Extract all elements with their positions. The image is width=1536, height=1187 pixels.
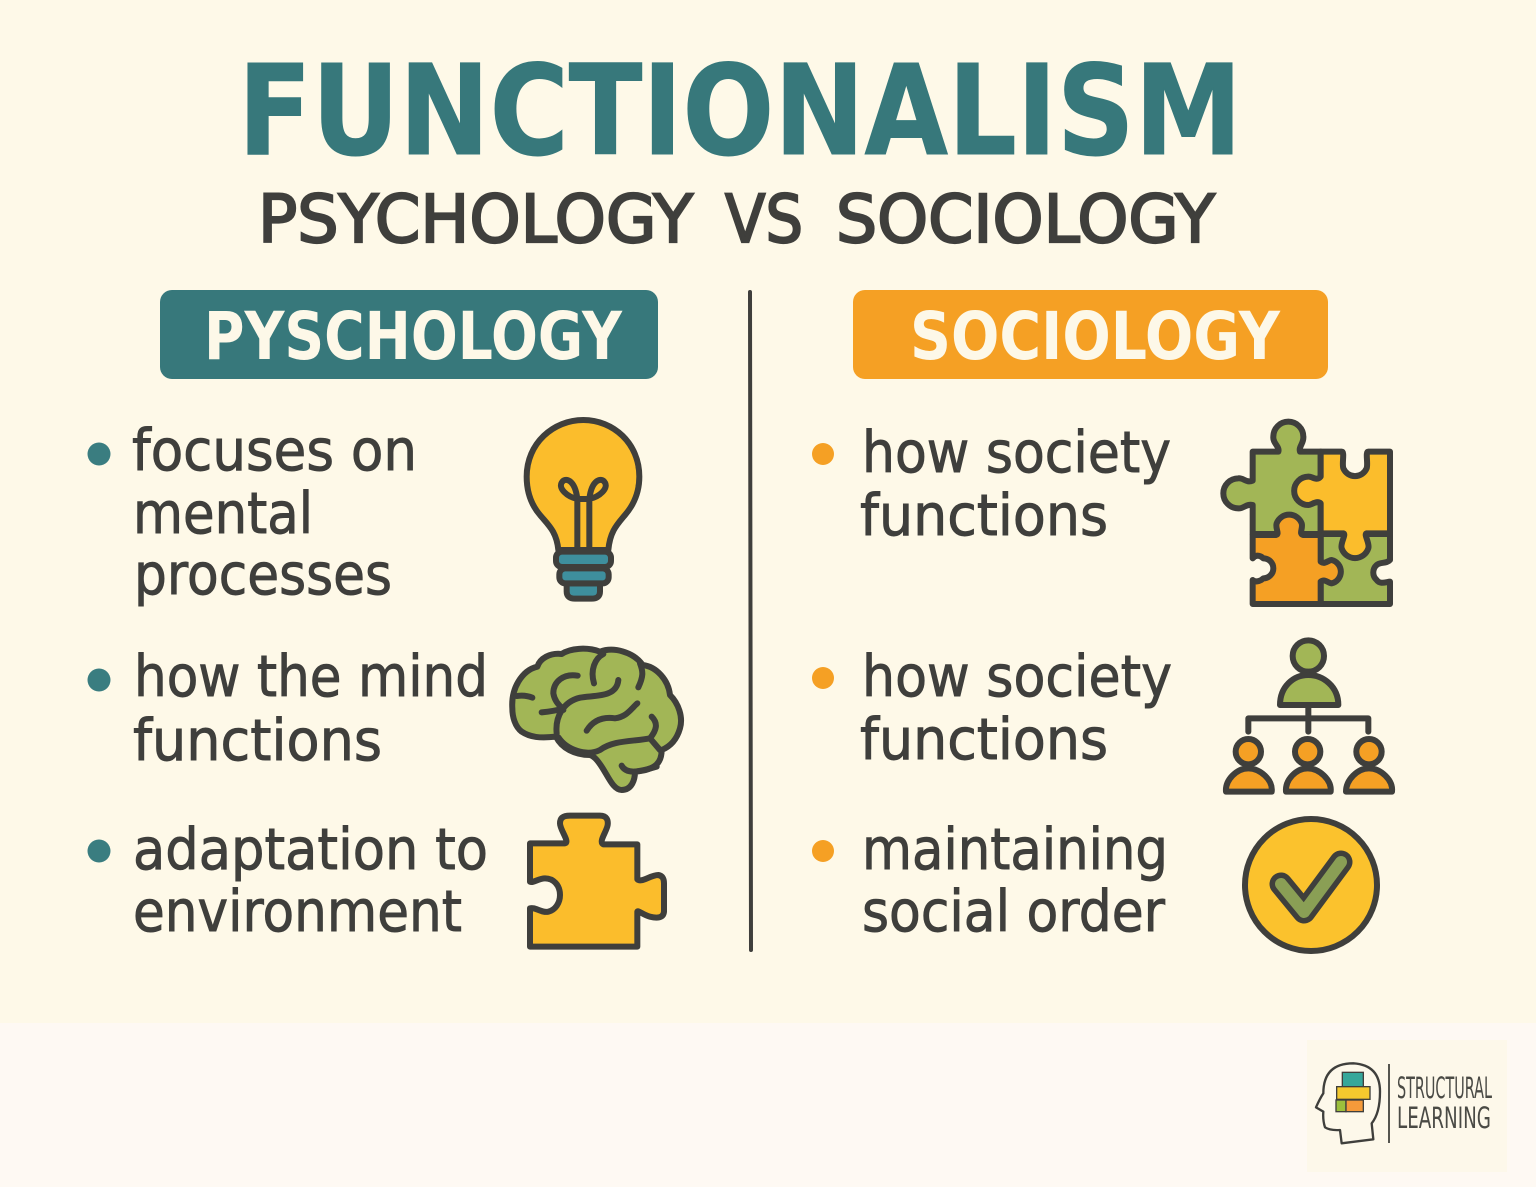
subtitle: [258, 181, 1216, 258]
bullet: how society functions: how society: [862, 420, 1171, 486]
title: FUNCTIONALISM: [238, 39, 1242, 184]
icon: hierarchy of people: [1226, 640, 1392, 792]
logo wordmark: [1397, 1071, 1492, 1135]
bullet: adaptation to environment: [88, 817, 488, 945]
subtitle: SOCIOLOGY: [836, 181, 1216, 258]
bullet: adaptation to environment: environment: [133, 879, 462, 945]
bullet: how the mind functions: [88, 644, 488, 774]
bullet: focuses on mental processes: mental: [133, 481, 313, 547]
icon: check mark badge: [1245, 819, 1377, 951]
icon: head with blocks: [1316, 1063, 1380, 1143]
icon: light bulb: [527, 420, 639, 599]
bullet: how society functions: [812, 420, 1171, 549]
bullet: how society functions: functions: [860, 483, 1108, 549]
center divider: [750, 292, 751, 950]
panel: sociology: [812, 290, 1392, 951]
icon: brain: [512, 649, 681, 790]
bullet: how the mind functions: how the mind: [134, 644, 488, 710]
bullet: focuses on mental processes: focuses on: [132, 418, 417, 484]
bullet: how society functions: [812, 644, 1172, 773]
bullet: how society functions: how society: [862, 644, 1172, 710]
bullet: maintaining social order: social order: [862, 879, 1166, 945]
subtitle: PSYCHOLOGY: [258, 181, 694, 258]
icon: puzzle piece: [530, 816, 664, 947]
bullet: maintaining social order: maintaining: [862, 817, 1168, 883]
bullet: how the mind functions: functions: [133, 708, 382, 774]
logo divider: [1388, 1064, 1390, 1143]
heading: psychology: PYSCHOLOGY: [204, 298, 623, 375]
bullet: focuses on mental processes: processes: [134, 542, 392, 608]
logo: Structural Learning: [1307, 1040, 1507, 1172]
icon: interlocking puzzle: [1223, 422, 1390, 604]
bullet: how society functions: functions: [860, 707, 1108, 773]
panel: psychology: [88, 290, 681, 947]
bullet: focuses on mental processes: [88, 418, 417, 608]
footer band: [0, 1023, 1536, 1187]
heading: sociology: SOCIOLOGY: [910, 298, 1281, 375]
bullet: adaptation to environment: adaptation to: [133, 817, 488, 883]
subtitle: VS: [725, 181, 803, 258]
bullet: maintaining social order: [812, 817, 1168, 945]
